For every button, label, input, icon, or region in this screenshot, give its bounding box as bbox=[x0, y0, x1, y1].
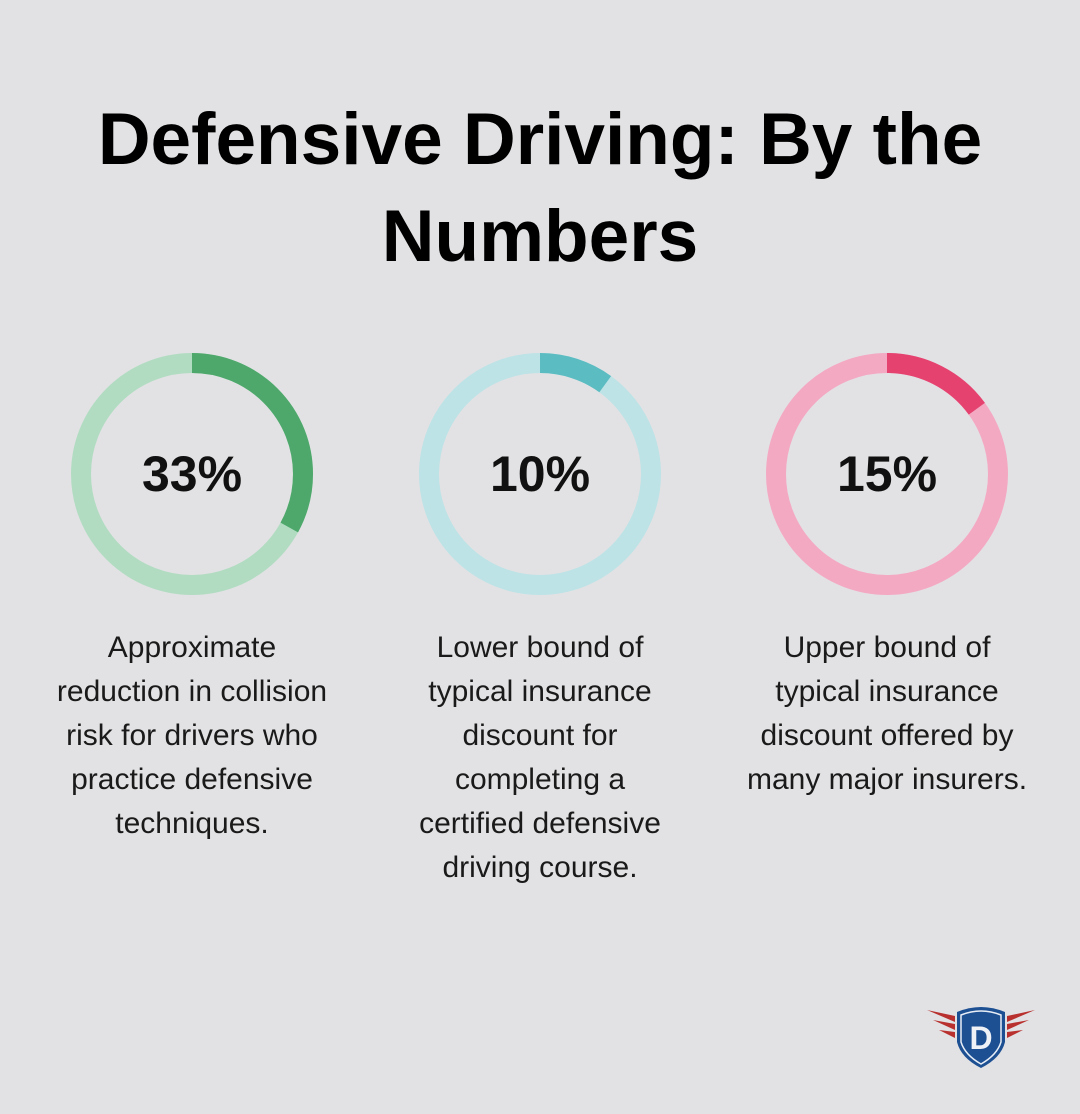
icon: logo shield bbox=[927, 1007, 1035, 1068]
panel: 10% ring: 10% bbox=[490, 446, 590, 502]
text: 15% description: many major insurers. bbox=[747, 763, 1027, 796]
text: 33% description: Approximate bbox=[108, 631, 276, 664]
panel: 15% ring: 15% bbox=[837, 446, 937, 502]
text: 10% description bbox=[419, 631, 661, 884]
panel: 15% ring bbox=[766, 353, 1008, 595]
text: 33% description: practice defensive bbox=[71, 763, 313, 796]
text: 33% description: techniques. bbox=[115, 807, 269, 840]
title: Defensive Driving: By the bbox=[98, 99, 982, 180]
icon: logo shield: D bbox=[969, 1020, 993, 1056]
title: Numbers bbox=[382, 196, 698, 277]
text: 15% description: typical insurance bbox=[775, 675, 999, 708]
text: 10% description: driving course. bbox=[442, 851, 638, 884]
text: 10% description: completing a bbox=[455, 763, 625, 796]
text: 10% description: certified defensive bbox=[419, 807, 661, 840]
text: 15% description: discount offered by bbox=[761, 719, 1013, 752]
text: 10% description: Lower bound of bbox=[437, 631, 643, 664]
text: 33% description: risk for drivers who bbox=[66, 719, 318, 752]
text: 15% description bbox=[747, 631, 1027, 796]
text: 33% description bbox=[57, 631, 327, 840]
text: 10% description: discount for bbox=[462, 719, 618, 752]
text: 10% description: typical insurance bbox=[428, 675, 652, 708]
title bbox=[98, 99, 982, 277]
text: 33% description: reduction in collision bbox=[57, 675, 327, 708]
panel: 33% ring bbox=[71, 353, 313, 595]
text: 15% description: Upper bound of bbox=[784, 631, 990, 664]
panel: 33% ring: 33% bbox=[142, 446, 242, 502]
panel: 10% ring bbox=[419, 353, 661, 595]
